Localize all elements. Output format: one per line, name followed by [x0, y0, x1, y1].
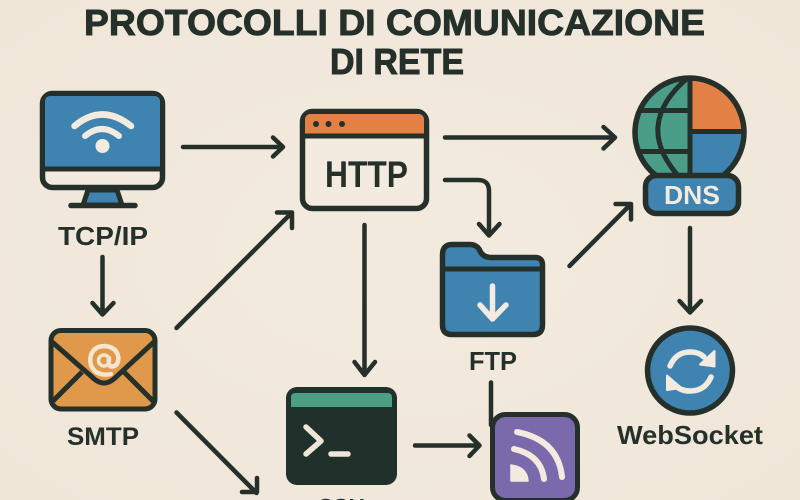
- window title bar: [305, 114, 424, 134]
- arrow: HTTP to FTP: [445, 180, 500, 236]
- arrow: HTTP to SSH: [354, 225, 375, 375]
- icon: monitor with wifi: [42, 94, 162, 206]
- arrow: SSH to RSS: [415, 436, 480, 456]
- arrow: SMTP to HTTP: [176, 212, 292, 328]
- icon: envelope: [51, 330, 155, 409]
- SSH node: [286, 387, 397, 500]
- label: SMTP: SMTP: [67, 423, 139, 451]
- arrow: TCP/IP to HTTP: [183, 138, 283, 156]
- label: TCP/IP: TCP/IP: [58, 221, 148, 251]
- icon: folder: [442, 244, 544, 334]
- label: FTP: FTP: [469, 346, 517, 376]
- arrow: DNS to WebSocket: [680, 228, 701, 312]
- icon: sync circle: [648, 328, 732, 413]
- SMTP node: [51, 330, 155, 451]
- icon: RSS feed: [492, 414, 578, 500]
- label pill: DNS: DNS: [664, 180, 720, 210]
- icon: globe: [632, 75, 747, 174]
- icon: terminal: [286, 387, 397, 485]
- title: [84, 2, 705, 82]
- WebSocket node: [617, 328, 763, 450]
- title: DI RETE: [330, 41, 464, 82]
- FTP node: [442, 244, 544, 376]
- TCP/IP node: [42, 94, 162, 251]
- label: WebSocket: WebSocket: [617, 420, 763, 450]
- line: FTP to RSS: [489, 382, 493, 425]
- arrow: HTTP to DNS: [445, 127, 615, 148]
- arrow: FTP to DNS: [570, 204, 631, 266]
- title: PROTOCOLLI DI COMUNICAZIONE: [84, 2, 705, 43]
- arrow: SMTP to SSH: [176, 412, 257, 493]
- arrow: TCP/IP to SMTP: [92, 257, 114, 314]
- label: HTTP: HTTP: [325, 154, 408, 195]
- DNS node: [630, 72, 750, 214]
- HTTP node: [302, 112, 426, 208]
- label pill: DNS: [646, 176, 738, 214]
